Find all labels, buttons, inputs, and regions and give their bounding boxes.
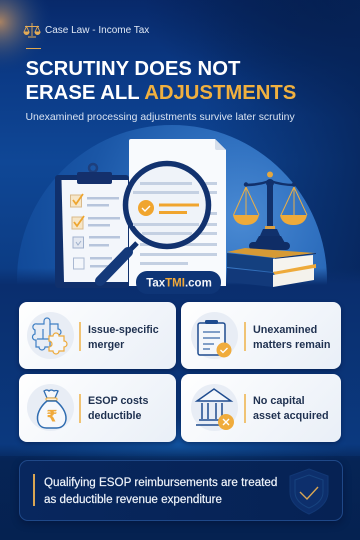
icon: clipboard check bbox=[197, 320, 232, 358]
logo pill: TaxTMI.com bbox=[146, 278, 212, 290]
logo pill bbox=[136, 271, 221, 294]
clipboard bbox=[55, 164, 129, 288]
callout text bbox=[44, 476, 277, 506]
icon: bank with cross bbox=[194, 388, 234, 430]
card text bbox=[253, 395, 329, 422]
card: no capital asset acquired bbox=[181, 374, 341, 442]
callout text: as deductible revenue expenditure bbox=[44, 493, 222, 506]
books bbox=[227, 248, 316, 287]
card text: Unexamined bbox=[253, 324, 317, 336]
title: ERASE ALL ADJUSTMENTS bbox=[26, 82, 296, 104]
accent rule bbox=[26, 48, 41, 49]
card text: merger bbox=[88, 338, 124, 350]
category label: Case Law - Income Tax bbox=[45, 25, 149, 36]
card: unexamined matters remain bbox=[181, 302, 341, 369]
callout bbox=[18, 460, 342, 521]
card text: No capital bbox=[253, 395, 305, 407]
card text: matters remain bbox=[253, 338, 330, 350]
callout accent bar bbox=[32, 474, 34, 506]
card text: ESOP costs bbox=[88, 395, 148, 407]
title: SCRUTINY DOES NOT bbox=[26, 58, 240, 80]
card text: asset acquired bbox=[253, 410, 329, 422]
icon: header scales bbox=[23, 23, 41, 38]
subtitle: Unexamined processing adjustments survive later scrutiny bbox=[26, 112, 295, 122]
hero illustration bbox=[55, 139, 316, 294]
card text bbox=[88, 395, 148, 422]
scales of justice bbox=[233, 172, 307, 250]
icon: rupee money bag: ₹ bbox=[46, 406, 57, 426]
magnifier bbox=[100, 164, 208, 281]
card: esop costs deductible bbox=[18, 374, 176, 442]
document bbox=[129, 139, 226, 286]
card text bbox=[253, 324, 330, 350]
icon: rupee money bag bbox=[36, 389, 67, 429]
icon: shield check bbox=[290, 468, 328, 514]
callout text: Qualifying ESOP reimbursements are treated bbox=[44, 476, 277, 488]
title bbox=[26, 58, 296, 104]
card: issue-specific merger bbox=[18, 302, 176, 369]
card text: deductible bbox=[88, 410, 141, 422]
icon: puzzle bbox=[32, 317, 68, 355]
card text: Issue-specific bbox=[88, 324, 159, 336]
card text bbox=[88, 324, 159, 350]
